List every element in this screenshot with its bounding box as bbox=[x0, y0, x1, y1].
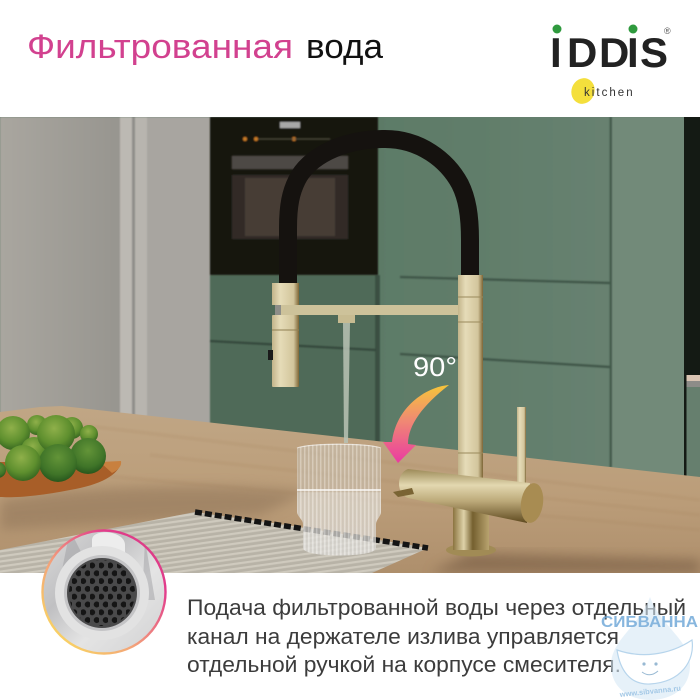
stem and base bbox=[446, 505, 496, 556]
body bbox=[393, 469, 546, 524]
description text: Подача фильтрованной воды через отдельный bbox=[187, 595, 686, 620]
logo: IDDIS kitchen bbox=[550, 24, 671, 107]
glass of water bbox=[297, 444, 381, 556]
detail circle: aerator bbox=[40, 528, 170, 658]
bowl of limes bbox=[0, 415, 121, 497]
arrow 90 degrees bbox=[383, 385, 449, 463]
logo: IDDIS kitchen: ® bbox=[664, 26, 671, 36]
countertop bbox=[0, 406, 700, 573]
label 90 degrees: 90° bbox=[413, 352, 457, 382]
far right dark column bbox=[684, 117, 700, 485]
description text: отдельной ручкой на корпусе смесителя. bbox=[187, 652, 621, 677]
description text: канал на держателе излива управляется bbox=[187, 624, 619, 649]
logo: IDDIS kitchen: kitchen bbox=[584, 87, 634, 99]
drying mat bbox=[0, 512, 428, 573]
title: вода bbox=[306, 28, 383, 66]
logo: IDDIS kitchen: IDDIS bbox=[550, 29, 668, 76]
title: Фильтрованная bbox=[27, 28, 293, 66]
wall left bbox=[0, 117, 211, 427]
hose bbox=[288, 139, 470, 284]
watermark: Sibvanna bbox=[601, 597, 698, 700]
oven bbox=[210, 117, 378, 275]
faucet bbox=[268, 139, 546, 556]
lever handle bbox=[517, 407, 526, 485]
green cabinets bbox=[210, 117, 686, 487]
water stream bbox=[343, 323, 350, 443]
watermark: Sibvanna: www.sibvanna.ru bbox=[618, 684, 682, 699]
main column bbox=[458, 275, 483, 480]
description text bbox=[187, 595, 686, 677]
watermark: Sibvanna: СИБВАННА bbox=[601, 614, 698, 631]
photo: kitchen scene bbox=[0, 117, 700, 573]
filtered water arm bbox=[281, 305, 465, 323]
pull-out spray head bbox=[268, 283, 299, 387]
title bbox=[27, 28, 383, 66]
